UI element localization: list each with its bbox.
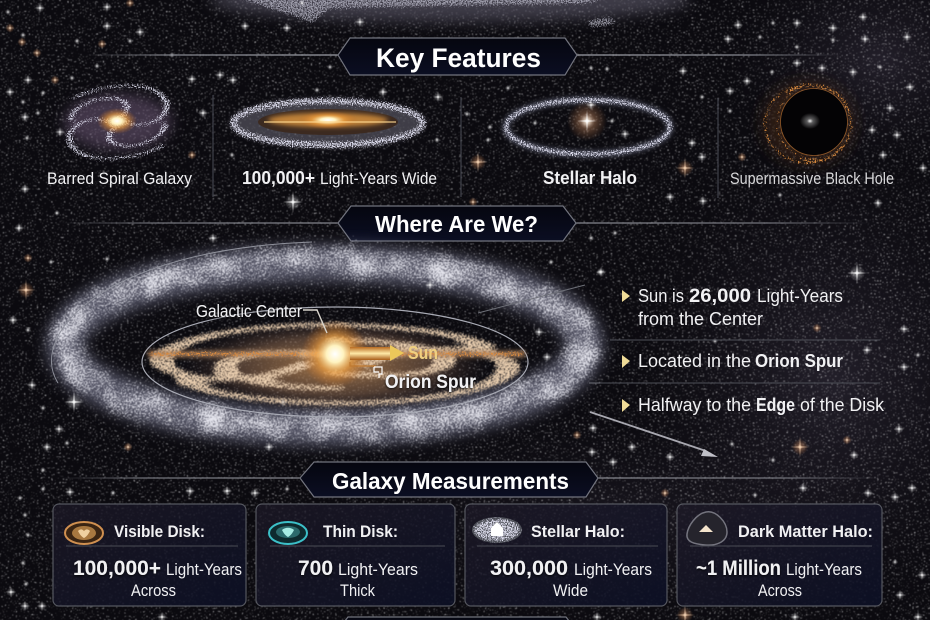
- inner disk with spiral arms: [142, 307, 528, 417]
- text: sun distance: from the Center: [638, 309, 763, 329]
- value: Across: [758, 581, 802, 600]
- text: orion spur location: Orion Spur: [755, 350, 843, 371]
- value: 300,000: [490, 557, 568, 580]
- label: 100,000+ Light-Years Wide: [242, 168, 437, 188]
- section: Galaxy Measurements: [60, 462, 880, 497]
- label: Galactic Center: [196, 301, 327, 333]
- label: 100,000+ Light-Years Wide: 100,000+: [242, 168, 315, 188]
- title: Stellar Halo:: [531, 522, 625, 541]
- icon: halo cloud: [472, 517, 522, 543]
- value: [696, 557, 862, 600]
- value: ~1 Million: [696, 557, 781, 580]
- value: Across: [131, 581, 176, 600]
- value: Thick: [340, 581, 375, 600]
- heading: Galaxy Measurements: [300, 462, 598, 497]
- panel: visible disk: [53, 504, 246, 606]
- panel: thin disk: [256, 504, 455, 606]
- text: sun distance: Light-Years: [757, 286, 843, 306]
- text: halfway to edge: Edge: [756, 395, 795, 415]
- panel: dark matter halo: [677, 504, 882, 606]
- value: [298, 557, 418, 600]
- text: sun distance: Sun is: [638, 286, 684, 306]
- heading: Key Features: Key Features: [376, 43, 541, 73]
- section: Where Are We: [60, 206, 870, 241]
- label: Barred Spiral Galaxy: Barred Spiral Galaxy: [47, 169, 192, 188]
- icon: dark matter blob: [687, 512, 727, 545]
- text: halfway to edge: [622, 395, 885, 415]
- value: Light-Years: [338, 560, 418, 579]
- icon: stellar halo ring: [506, 100, 670, 154]
- label: Orion Spur: Orion Spur: [385, 372, 477, 393]
- value: 700: [298, 557, 333, 580]
- value: Light-Years: [166, 560, 242, 579]
- heading: Where Are We?: Where Are We?: [375, 211, 538, 237]
- label: Supermassive Black Hole: Supermassive Black Hole: [730, 170, 894, 188]
- value: Light-Years: [786, 560, 862, 579]
- panel: stellar halo: [465, 504, 667, 606]
- text: halfway to edge: of the Disk: [800, 395, 885, 415]
- icon: gold disk: [65, 522, 103, 544]
- label: 100,000+ Light-Years Wide: Light-Years Wide: [320, 169, 437, 188]
- value: Light-Years: [574, 560, 652, 579]
- arrow: sun position: [350, 345, 404, 366]
- label: Sun: Sun: [408, 343, 438, 363]
- value: 100,000+: [73, 557, 161, 580]
- title: Dark Matter Halo:: [738, 522, 873, 541]
- title: Visible Disk:: [114, 522, 205, 541]
- section: Key Features: [85, 38, 840, 75]
- title: Thin Disk:: [323, 522, 398, 541]
- text: sun distance: [622, 285, 843, 329]
- icon: orion spur marker: [374, 367, 382, 378]
- chart: milky way diagram: [51, 242, 620, 452]
- icon: teal disk: [269, 522, 307, 544]
- text: halfway to edge: Halfway to the: [638, 395, 751, 415]
- outer ring of galaxy: [51, 242, 620, 452]
- panel: key features row: [47, 78, 894, 198]
- label: Stellar Halo: Stellar Halo: [543, 168, 637, 188]
- text: orion spur location: [622, 350, 843, 371]
- heading: Galaxy Measurements: Galaxy Measurements: [332, 468, 569, 494]
- milky band at top: [210, 0, 690, 30]
- label: Galactic Center: Galactic Center: [196, 301, 302, 321]
- icon: supermassive black hole: [762, 81, 854, 165]
- text: sun distance: 26,000: [689, 285, 751, 307]
- text: orion spur location: Located in the: [638, 351, 751, 371]
- value: [490, 557, 652, 600]
- panel: location facts: [590, 285, 885, 457]
- icon: galaxy disk side view: [230, 98, 426, 148]
- value: [73, 557, 242, 600]
- heading: Where Are We?: [338, 206, 576, 241]
- value: Wide: [553, 581, 588, 600]
- icon: barred spiral galaxy: [61, 78, 175, 166]
- arrow: pointer to disk edge: [590, 412, 718, 457]
- heading: Key Features: [338, 38, 577, 75]
- heading: cropped banner at bottom edge: [341, 617, 573, 620]
